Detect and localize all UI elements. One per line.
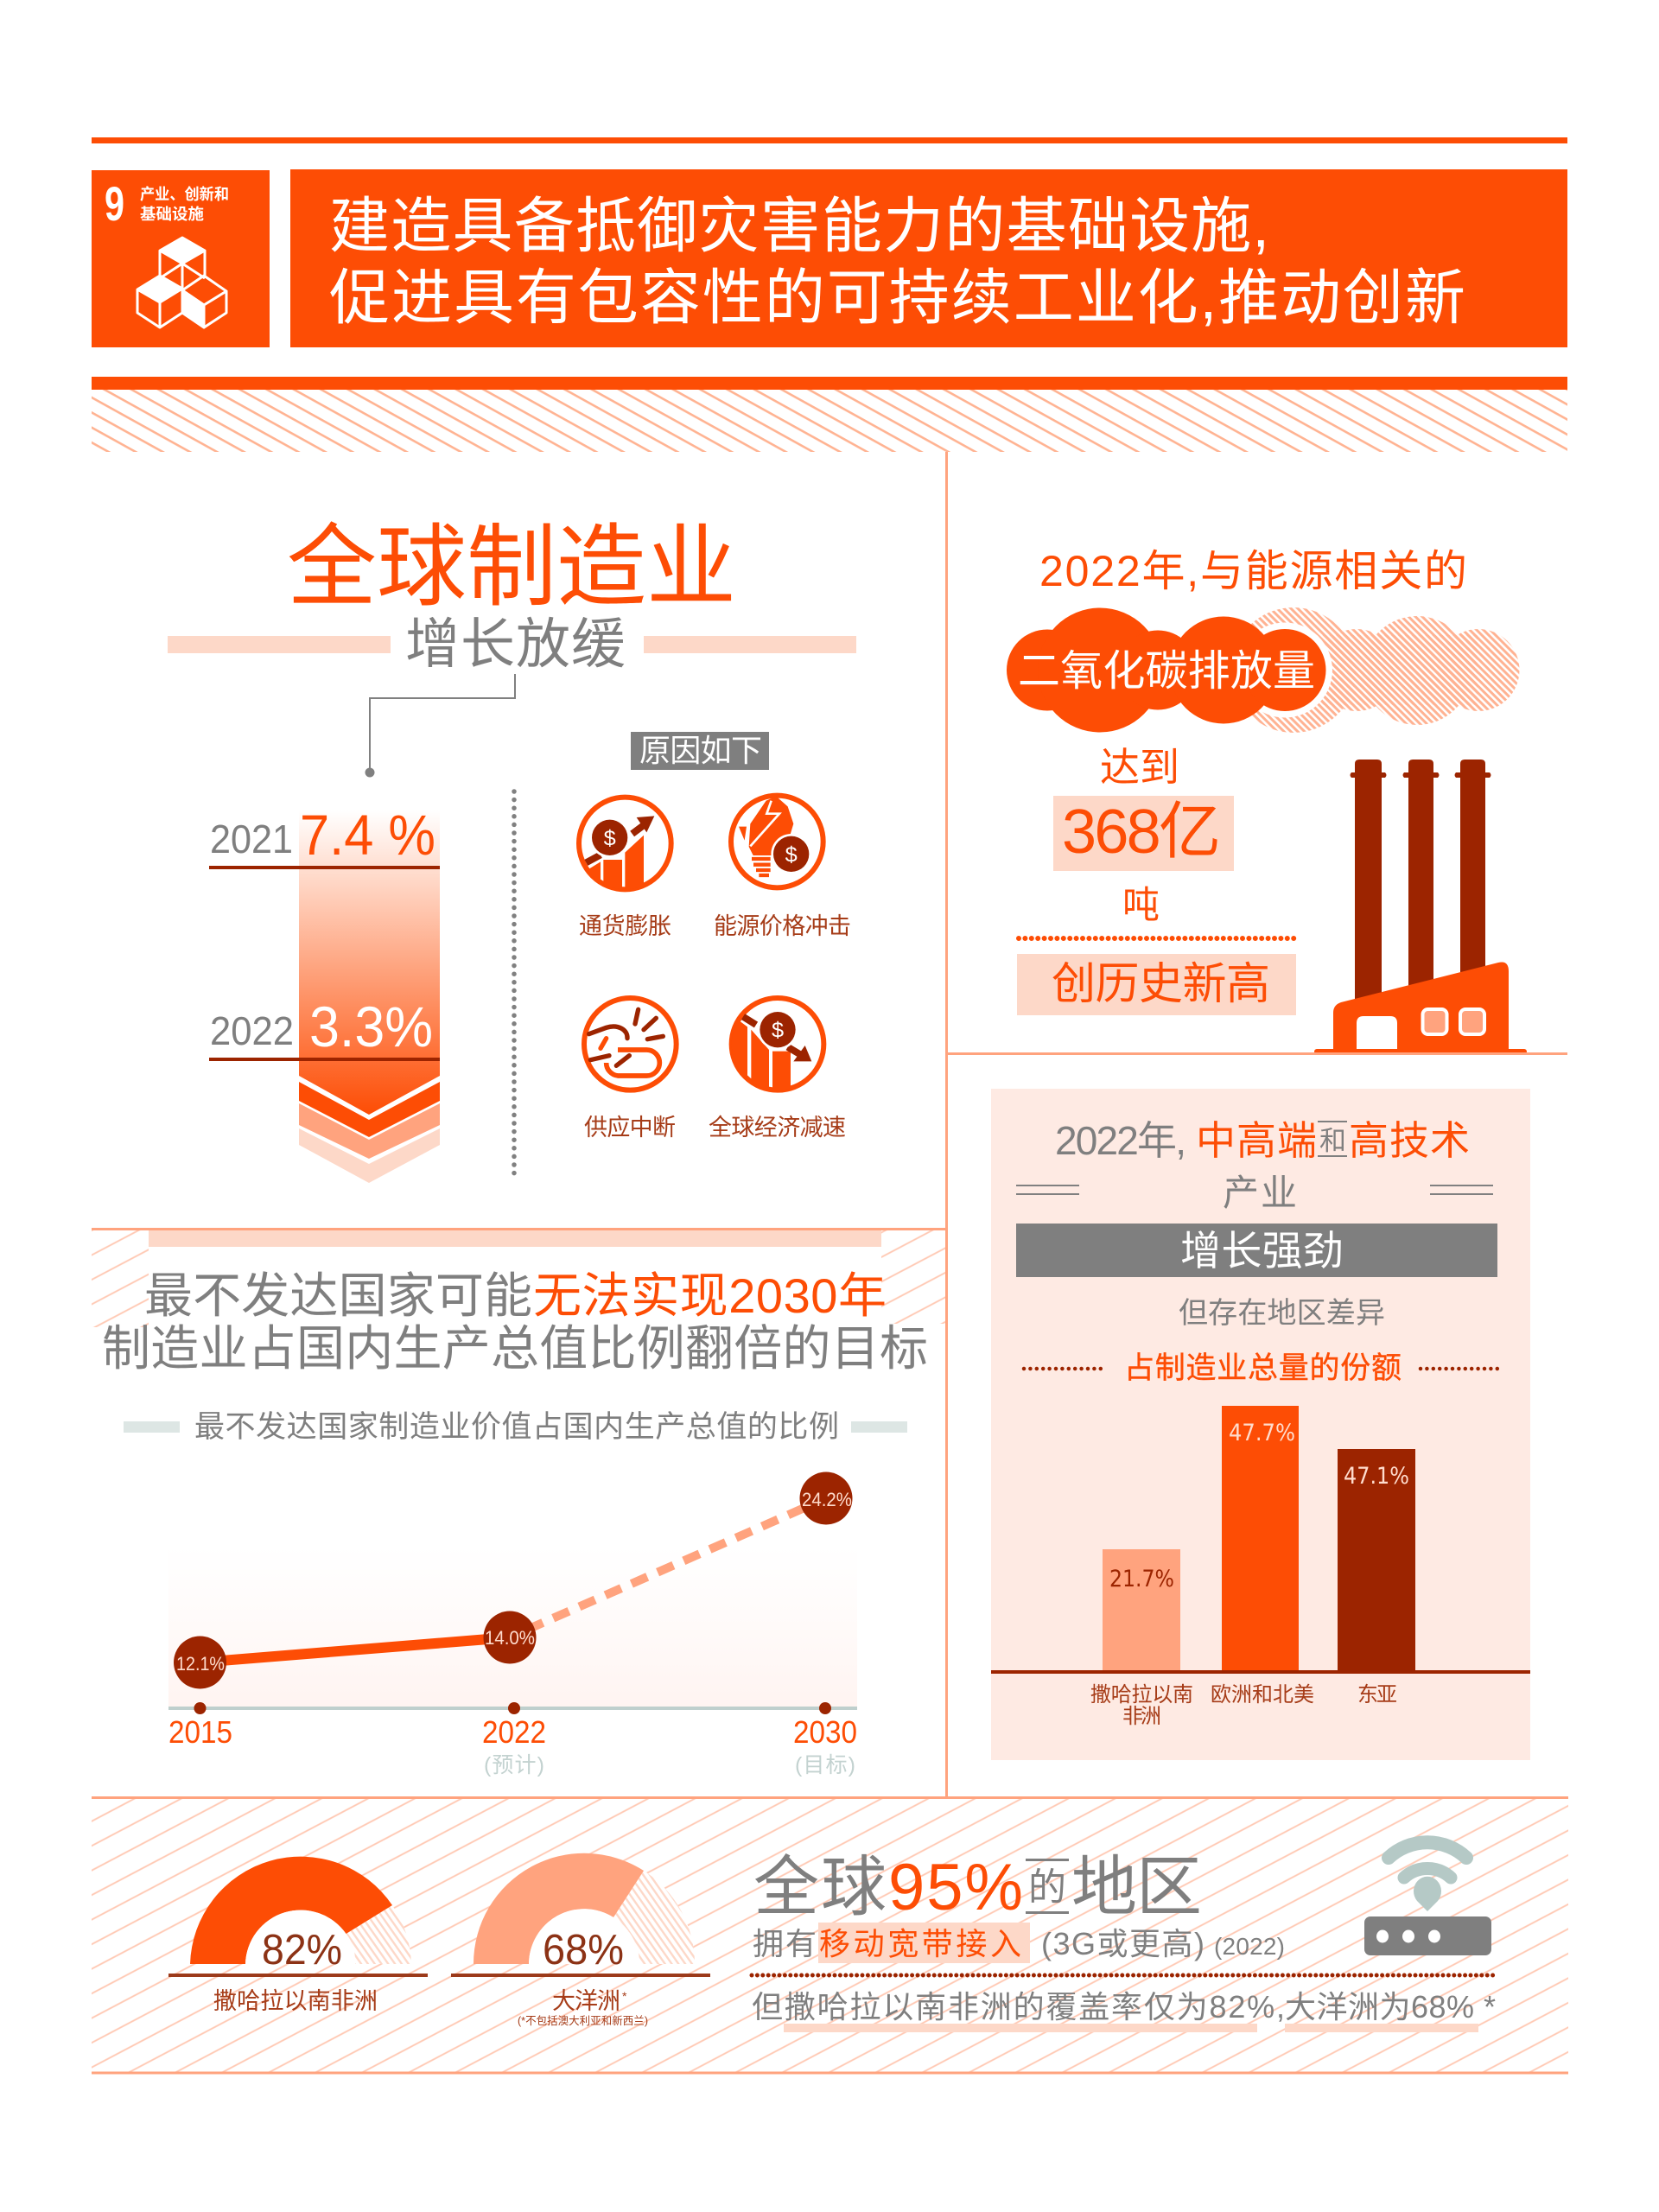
icon: energy prices: $: [785, 842, 798, 867]
axis labels: 2022: [482, 1714, 546, 1750]
gauge: Oceania: 68%: [543, 1927, 624, 1974]
chart: growth arrow: 7.4 %: [300, 803, 435, 867]
dotted separator: [512, 791, 517, 1177]
icon labels: 通货膨胀: [579, 913, 671, 939]
gauge: Oceania: 大洋洲: [552, 1988, 620, 2014]
heading: 95 percent: [753, 1851, 1202, 1924]
heading: 95 percent: 的: [1028, 1866, 1066, 1909]
top band: [149, 1230, 881, 1247]
text: tonnes: 吨: [1122, 885, 1160, 926]
bar labels: 东亚: [1357, 1683, 1397, 1707]
axis labels: 2015: [168, 1714, 232, 1750]
icon: inflation: $: [604, 826, 616, 850]
gauge: sub-Saharan Africa: [168, 1857, 428, 2014]
dotted rule: [1019, 936, 1296, 941]
text: mobile broadband access: (3G或更高): [1041, 1926, 1205, 1961]
connector: [365, 674, 515, 778]
heading: 和: [1319, 1126, 1346, 1156]
strong growth bar: [1016, 1224, 1497, 1277]
heading: 无法实现2030年: [533, 1268, 887, 1323]
title banner: 促进具有包容性的可持续工业化,推动创新: [329, 264, 1465, 332]
data point 2030: [800, 1472, 852, 1524]
dotted rule: [752, 1974, 1493, 1977]
text: mobile broadband access: [753, 1923, 1285, 1963]
data point 2030: 24.2%: [802, 1489, 852, 1510]
gauge: Oceania: *: [622, 1989, 627, 2003]
bar chart: [991, 1406, 1530, 1728]
title banner: [290, 169, 1567, 347]
bar: sub-Saharan Africa: 21.7%: [1109, 1566, 1174, 1592]
panel: least developed countries: [92, 1228, 945, 1777]
chart subtitle: 最不发达国家制造业价值占国内生产总值的比例: [194, 1410, 839, 1444]
gauge: Oceania: (*不包括澳大利亚和新西兰): [518, 2014, 648, 2027]
data point 2022: [484, 1611, 536, 1664]
header top rule: [92, 137, 1567, 143]
subheading with side bars: 增长放缓: [405, 614, 626, 675]
strong growth bar: 增长强劲: [1180, 1228, 1344, 1274]
bar: sub-Saharan Africa: [1103, 1549, 1180, 1671]
gauge: sub-Saharan Africa: 撒哈拉以南非洲: [213, 1988, 378, 2014]
panel: CO2 emissions: [948, 547, 1567, 1055]
bar: Europe and North America: [1222, 1406, 1299, 1671]
heading: 最不发达国家可能: [144, 1268, 532, 1323]
axis labels: [168, 1714, 857, 1750]
line chart: (预计): [484, 1753, 544, 1777]
text: coverage note: 大洋洲为68% *: [1285, 1989, 1496, 2024]
line chart: [168, 1472, 857, 1777]
gauge: sub-Saharan Africa: 82%: [262, 1927, 342, 1974]
goal name: [140, 185, 229, 223]
bar: East Asia: [1338, 1449, 1415, 1671]
icon: global slowdown: $: [772, 1019, 784, 1043]
panel rules: [92, 1797, 1568, 2073]
panel base rule: [948, 1052, 1567, 1055]
icon: energy prices: [731, 796, 823, 887]
axis labels: 2030: [793, 1714, 857, 1750]
record high: 创历史新高: [1052, 959, 1270, 1008]
text: mobile broadband access: 拥有: [753, 1926, 817, 1961]
header hatch band: [92, 390, 1567, 452]
gauge: Oceania: [451, 1853, 710, 2027]
icon: wifi router: [1364, 1842, 1491, 1955]
text: mobile broadband access: (2022): [1214, 1933, 1285, 1960]
subheading with side bars: [168, 614, 856, 675]
panel: global manufacturing: [168, 518, 856, 1183]
heading: 2022年,与能源相关的: [1039, 547, 1467, 595]
goal name: 产业、创新和: [140, 185, 229, 203]
heading: 95 percent: 95%: [888, 1851, 1023, 1924]
icon: supply disruption: [584, 998, 677, 1090]
text: coverage note: 但撒哈拉以南非洲的覆盖率仅为82%,: [752, 1989, 1285, 2024]
title banner: 建造具备抵御灾害能力的基础设施,: [329, 192, 1269, 259]
hatched cloud: [1230, 607, 1519, 733]
icon: stacked cubes: [137, 238, 226, 327]
data point 2015: [174, 1637, 226, 1688]
solid cloud with label: 二氧化碳排放量: [1018, 648, 1315, 695]
reasons tag: 原因如下: [639, 733, 762, 768]
icon: factory: [1314, 760, 1527, 1054]
icon labels: [579, 913, 851, 1141]
data point 2022: 14.0%: [485, 1627, 535, 1649]
panel corner hatching: [92, 1230, 945, 1327]
icon labels: 供应中断: [584, 1115, 676, 1141]
double rules: [1016, 1185, 1493, 1194]
bar: East Asia: 47.1%: [1344, 1463, 1409, 1490]
chart: growth arrow: [209, 803, 440, 1183]
heading: [102, 1268, 928, 1376]
vertical divider: [945, 452, 948, 1797]
icon labels: 全球经济减速: [709, 1115, 846, 1141]
text: reach: 达到: [1100, 745, 1179, 790]
SDG goal 9 badge: [92, 170, 270, 347]
heading: 全球制造业: [287, 518, 736, 618]
line chart: (目标): [795, 1753, 855, 1777]
header thick bar: [92, 377, 1567, 390]
chart: growth arrow: 3.3%: [309, 995, 433, 1058]
bar: Europe and North America: 47.7%: [1229, 1420, 1295, 1446]
heading: 2022年,: [1055, 1118, 1186, 1163]
icon: global slowdown: [730, 998, 823, 1091]
panel: high-tech industries: [991, 1089, 1530, 1760]
icon: inflation: [579, 798, 671, 893]
heading: 95 percent: 全球: [753, 1851, 887, 1924]
heading: 95 percent: 地区: [1071, 1851, 1202, 1924]
chart title: 占制造业总量的份额: [1124, 1351, 1402, 1385]
chart: growth arrow: 2021: [210, 817, 293, 861]
heading: [1055, 1118, 1470, 1213]
panel top rule: [92, 1228, 945, 1230]
heading: 中高端: [1196, 1118, 1317, 1163]
heading: 制造业占国内生产总值比例翻倍的目标: [102, 1321, 928, 1376]
goal number: 9: [105, 176, 124, 231]
text: regional differences: 但存在地区差异: [1179, 1297, 1385, 1330]
bar labels: 非洲: [1122, 1705, 1161, 1728]
panel: mobile broadband: [92, 1797, 1568, 2073]
heading: 高技术: [1349, 1118, 1470, 1163]
panel hatch: [92, 1798, 1568, 2073]
data point 2015: 12.1%: [176, 1653, 225, 1675]
text: mobile broadband access: 移动宽带接入: [819, 1926, 1021, 1961]
bar labels: 欧洲和北美: [1211, 1683, 1314, 1707]
solid cloud with label: [1007, 608, 1332, 733]
infographic page: [92, 137, 1568, 2074]
heading: 产业: [1223, 1173, 1297, 1213]
text: coverage note: [752, 1989, 1496, 2032]
chart: growth arrow: 2022: [210, 1008, 294, 1053]
bar labels: [1090, 1683, 1397, 1728]
record high: [1017, 954, 1296, 1015]
icon labels: 能源价格冲击: [714, 913, 851, 939]
stat: 36.8 billion: 368亿: [1062, 798, 1221, 867]
goal name: 基础设施: [140, 206, 204, 223]
bar labels: 撒哈拉以南: [1090, 1683, 1193, 1707]
